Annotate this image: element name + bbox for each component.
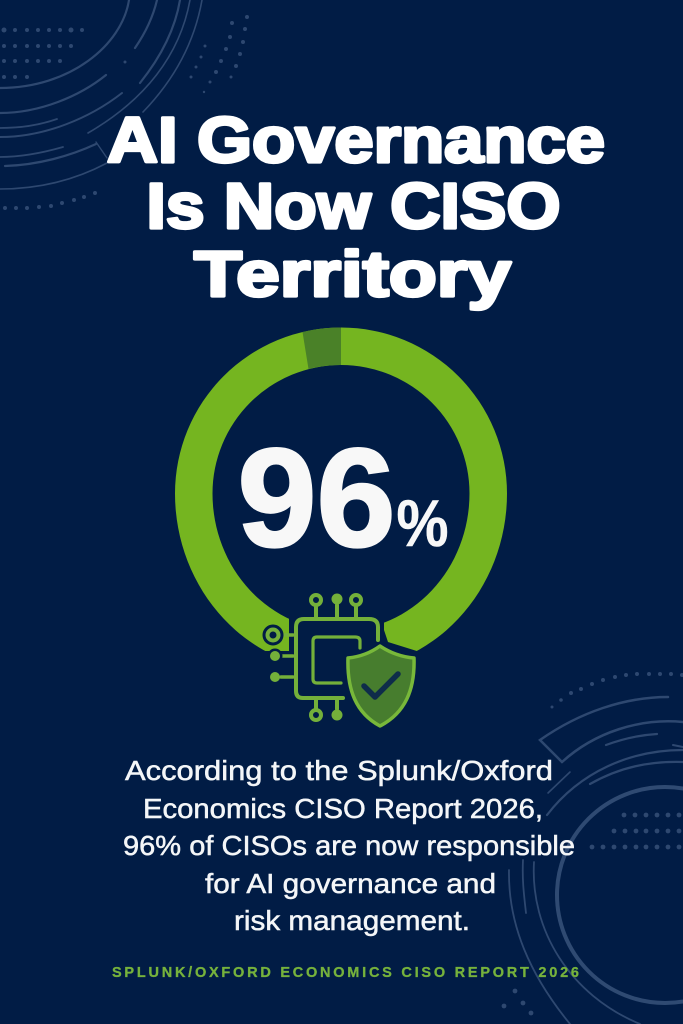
body text [123,755,575,936]
stat: 96%: % [396,486,448,560]
title: AI Governance [107,104,605,176]
decorative circuit arcs: top left [0,0,249,210]
icon: chip [265,594,378,720]
stat: 96%: 96 [238,419,396,576]
icon: shield with check [348,646,414,726]
donut chart: 96% [175,327,507,670]
body text: risk management. [234,905,470,936]
body text: According to the Splunk/Oxford [125,755,553,786]
body text: for AI governance and [205,868,496,899]
body text: Economics CISO Report 2026, [143,793,543,824]
title: Is Now CISO [146,170,560,242]
decorative circuit arcs: bottom right [502,672,683,1024]
icon background gap [250,610,420,700]
title: Territory [194,238,511,310]
ring: main green arc [175,328,507,670]
title [107,104,605,310]
icon: AI chip with security shield [250,594,420,726]
source footer: SPLUNK/OXFORD ECONOMICS CISO REPORT 2026 [112,965,579,981]
body text: 96% of CISOs are now responsible [123,830,575,861]
ring: remaining 4% segment [302,327,341,369]
